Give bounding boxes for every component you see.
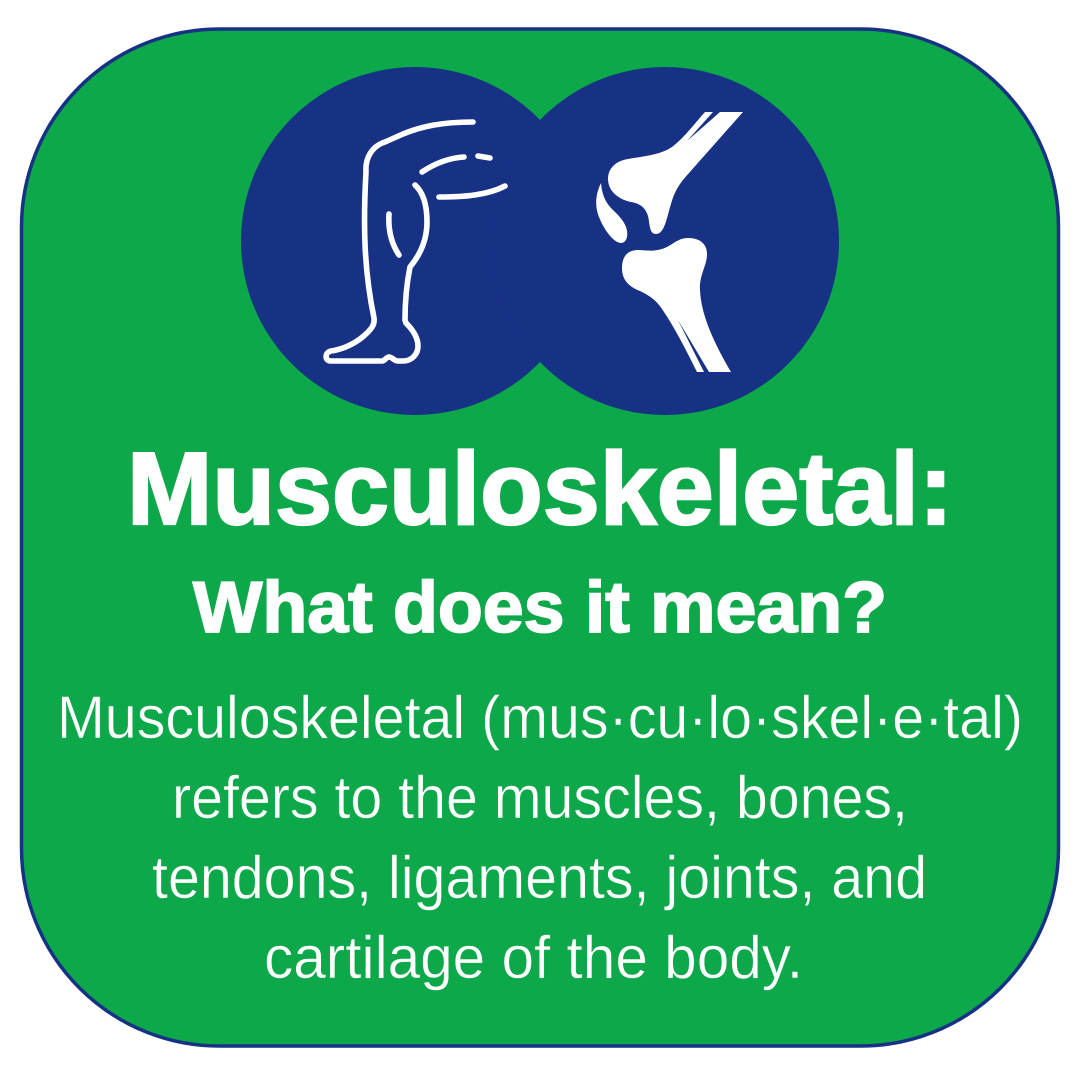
icon badge: overlapping blue circles: [241, 67, 839, 415]
definition text: tendons, ligaments, joints, and: [152, 844, 927, 911]
icon: knee joint bones: [596, 112, 743, 372]
icon: leg outline: [326, 122, 505, 361]
definition text: [57, 684, 1023, 991]
title: Musculoskeletal:: [127, 431, 953, 546]
definition text: cartilage of the body.: [264, 924, 803, 991]
patella: [596, 183, 627, 243]
femur: [608, 112, 743, 234]
subtitle: What does it mean?: [193, 568, 887, 648]
definition text: Musculoskeletal (mus·cu·lo·skel·e·tal): [57, 684, 1023, 751]
definition text: refers to the muscles, bones,: [172, 764, 908, 831]
tibia and fibula: [622, 238, 731, 372]
